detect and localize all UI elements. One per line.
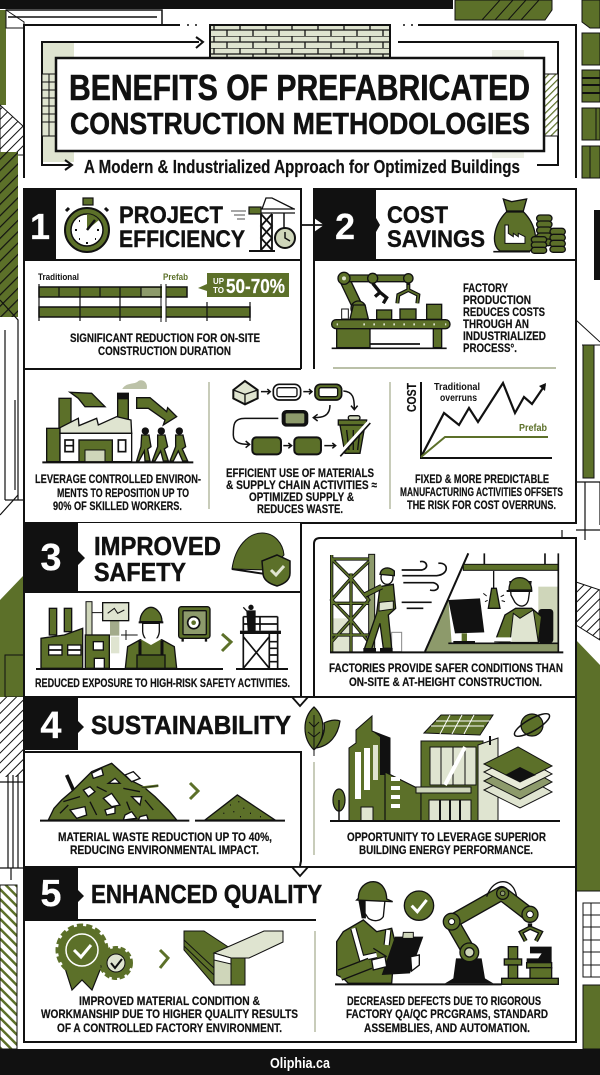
icon: supply chain flow [233, 381, 370, 456]
icon: waste pile [40, 763, 189, 821]
title: CONSTRUCTION METHODOLOGIES [70, 106, 530, 141]
number 3: 3 [40, 537, 62, 579]
chart: schedule comparison [38, 272, 250, 324]
text: energy performance: OPPORTUNITY TO LEVERAGE SUPERIOR [347, 830, 546, 844]
icon: green building [333, 715, 498, 821]
brick wall [210, 25, 390, 58]
heading: improved safety [94, 531, 221, 587]
icon: robot arm [443, 882, 558, 984]
icon: factory desk worker [330, 553, 563, 652]
text: materials [226, 466, 377, 516]
panel: safer conditions [314, 538, 576, 697]
text: energy performance: BUILDING ENERGY PERFORMANCE. [359, 843, 533, 857]
text: material condition [41, 994, 298, 1035]
header frame [24, 25, 576, 178]
text: materials: REDUCES WASTE. [257, 502, 343, 516]
number 1: 1 [30, 206, 50, 247]
text: on-site duration: SIGNIFICANT REDUCTION FOR ON-SITE [70, 331, 260, 345]
icon: leaves [305, 707, 340, 756]
heading: cost savings: SAVINGS [387, 226, 485, 253]
number 5: 5 [40, 873, 62, 915]
chart: schedule comparison: Traditional [38, 272, 79, 282]
decorative left building strip [0, 10, 162, 1049]
heading: project efficiency: EFFICIENCY [119, 226, 245, 253]
text: material condition: OF A CONTROLLED FACTORY ENVIRONMENT. [57, 1021, 282, 1035]
icon: worker on scaffold [332, 554, 446, 652]
footer: Oliphia.ca [270, 1055, 331, 1072]
icon: money bag and coins [493, 199, 565, 253]
number 5 [24, 867, 84, 920]
text: decreased defects: FACTORY QA/QC PRCGRAMS, STANDARD [346, 1007, 548, 1021]
heading: cost savings [387, 202, 485, 253]
connector notch [292, 867, 308, 876]
text: factory production: PRODUCTION [463, 293, 531, 307]
text: on-site duration: CONSTRUCTION DURATION [98, 344, 231, 358]
heading: project efficiency [119, 202, 245, 253]
icon: factory hazards [41, 602, 138, 668]
text: safety activities: REDUCED EXPOSURE TO HIGH-RISK SAFETY ACTIVITIES. [35, 676, 290, 690]
text: materials: OPTIMIZED SUPPLY & [249, 490, 354, 504]
chevron [222, 634, 231, 651]
text: materials: & SUPPLY CHAIN ACTIVITIES ≈ [226, 478, 377, 492]
icon: quality badges [58, 926, 131, 990]
panel: enhanced quality [24, 867, 576, 1042]
heading: project efficiency: PROJECT [119, 202, 223, 229]
chevron [160, 950, 168, 968]
chart: schedule comparison: Prefab [163, 272, 188, 282]
side wall panels [42, 74, 558, 136]
text: decreased defects: DECREASED DEFECTS DUE TO RIGOROUS [347, 994, 541, 1008]
chart: cost overruns: Traditional [434, 382, 480, 393]
text: material condition: IMPROVED MATERIAL CONDITION & [79, 994, 260, 1008]
text: factory production: FACTORY [463, 281, 508, 295]
subtitle: A Modern & Industrialized Approach for Optimized Buildings [84, 157, 520, 177]
icon: robot conveyor [332, 272, 450, 348]
chart: cost overruns: COST [404, 383, 419, 412]
icon: inspector with clipboard [335, 882, 502, 984]
callout: up to 50-70% [198, 273, 289, 298]
number 4 [24, 697, 84, 750]
callout: up to 50-70%: 50-70% [226, 276, 285, 298]
text: skilled workers: LEVERAGE CONTROLLED ENVIRON- [35, 472, 201, 486]
icon: worker [125, 607, 177, 668]
text: safer conditions [329, 661, 563, 689]
chart: cost overruns [404, 382, 552, 458]
number 3 [24, 523, 85, 592]
text: skilled workers: 90% OF SKILLED WORKERS. [53, 499, 182, 513]
text: material condition: WORKMANSHIP DUE TO HIGHER QUALITY RESULTS [41, 1007, 298, 1021]
decorative right building strip [455, 0, 600, 1049]
number 4: 4 [40, 705, 62, 747]
chart: cost overruns: Prefab [519, 423, 547, 434]
title [56, 58, 544, 151]
icon: factory and workers [42, 380, 193, 462]
chart: cost overruns: overruns [440, 393, 477, 404]
text: energy performance [347, 830, 546, 857]
number 1 [24, 189, 56, 260]
text: decreased defects: ASSEMBLIES, AND AUTOMATION. [364, 1021, 530, 1035]
panel: improved safety [24, 523, 301, 697]
text: on-site duration [70, 331, 260, 358]
callout: up to 50-70%: UP [213, 277, 225, 286]
icon: stopwatch [65, 198, 109, 252]
text: safer conditions: ON-SITE & AT-HEIGHT CONSTRUCTION. [349, 675, 542, 689]
callout: up to 50-70%: TO [213, 286, 224, 295]
panel: sustainability [24, 697, 576, 867]
arrow: section 1 to 2 [301, 218, 325, 232]
icon: crane and clock [231, 198, 295, 251]
text: factory production: INDUSTRIALIZED [463, 329, 546, 343]
text: waste reduction [58, 830, 272, 857]
heading: improved safety: SAFETY [94, 557, 186, 587]
icon: insulation layers [484, 747, 552, 808]
icon: scaffold [240, 605, 281, 668]
heading: improved safety: IMPROVED [94, 531, 221, 561]
icon: reduced pile [195, 795, 285, 821]
heading: cost savings: COST [387, 202, 448, 229]
panel: cost savings [314, 189, 576, 369]
text: factory production: THROUGH AN [463, 317, 529, 331]
icon: planet [512, 710, 552, 740]
text: predictable: FIXED & MORE PREDICTABLE [415, 472, 549, 486]
text: waste reduction: MATERIAL WASTE REDUCTION UP TO 40%, [58, 830, 272, 844]
number 2 [314, 189, 380, 260]
panel: project efficiency [24, 189, 301, 369]
number 2: 2 [335, 206, 355, 247]
header divider [24, 259, 301, 261]
text: decreased defects [346, 994, 548, 1035]
heading: enhanced quality: ENHANCED QUALITY [91, 879, 322, 909]
top black bar [0, 0, 453, 9]
text: factory production: PROCESS°. [463, 341, 517, 355]
text: skilled workers [35, 472, 201, 513]
panel: cost benefits row [24, 369, 576, 523]
footer [0, 1049, 600, 1075]
icon: safe [179, 607, 210, 642]
text: factory production [463, 281, 546, 355]
text: factory production: REDUCES COSTS [463, 305, 545, 319]
icon: hard hat and shield [232, 533, 290, 586]
icon: precise beam joint [184, 931, 283, 985]
text: predictable [400, 472, 563, 512]
connector notch [292, 697, 308, 706]
text: predictable: THE RISK FOR COST OVERRUNS. [407, 498, 556, 512]
text: materials: EFFICIENT USE OF MATERIALS [226, 466, 374, 480]
text: waste reduction: REDUCING ENVIRONMENTAL IMPACT. [70, 843, 259, 857]
heading: sustainability: SUSTAINABILITY [91, 710, 291, 740]
chevron [190, 783, 198, 799]
text: skilled workers: MENTS TO REPOSITION UP TO [57, 486, 189, 500]
